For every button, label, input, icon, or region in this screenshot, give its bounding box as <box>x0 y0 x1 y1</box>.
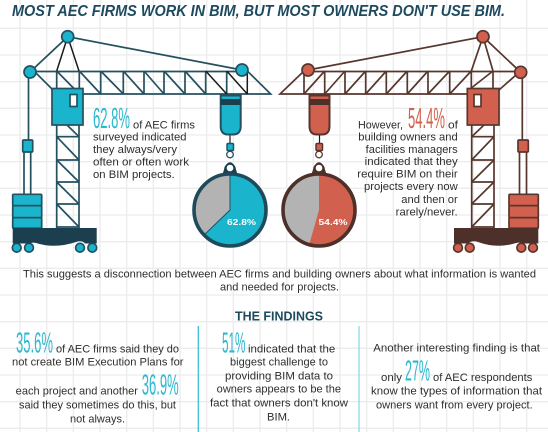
summary text: and needed for projects. <box>220 282 339 294</box>
finding 1: not create BIM Execution Plans for <box>12 356 184 368</box>
right crane statistic text: require BIM on their <box>357 169 458 181</box>
finding 1: 35.6% <box>16 327 53 359</box>
finding 3: owners want from every project. <box>376 399 533 411</box>
right crane statistic text: and then or <box>401 194 458 206</box>
left crane statistic text: they always/very <box>93 144 178 156</box>
right counterweight <box>509 140 538 228</box>
finding 3: Another interesting finding is that <box>373 342 540 354</box>
finding 1 <box>12 327 184 425</box>
left crane (AEC firms) <box>12 31 271 252</box>
finding 3: 27% <box>405 356 430 388</box>
left counterweight <box>13 140 42 228</box>
right hook <box>309 96 330 178</box>
right crane statistic text: building owners and <box>358 132 458 144</box>
finding 2: fact that owners don't know <box>210 398 348 410</box>
left crane statistic text: on BIM projects. <box>93 169 175 181</box>
right crane cab <box>467 88 499 125</box>
left crane statistic text: often or often work <box>93 157 190 169</box>
left crane wheels <box>12 243 97 252</box>
left crane nodes <box>24 31 248 78</box>
right crane statistic text: projects every now <box>364 181 458 193</box>
finding 2: owners appears to be the <box>217 384 341 396</box>
heading: the findings: THE FINDINGS <box>235 310 323 324</box>
left hook <box>220 96 241 178</box>
finding 2: indicated that the <box>248 344 335 356</box>
right crane statistic text: 54.4% <box>408 103 445 135</box>
title: MOST AEC FIRMS WORK IN BIM, BUT MOST OWNERS DON'T USE BIM. <box>12 3 505 20</box>
left crane statistic text: 62.8% <box>93 103 130 135</box>
finding 1: not always. <box>70 413 125 425</box>
finding 3 <box>371 342 542 411</box>
finding 2: biggest challenge to <box>230 356 328 368</box>
right crane statistic text <box>357 103 459 219</box>
left pie chart: 62.8% <box>194 174 266 246</box>
summary text <box>23 268 536 294</box>
finding 3: know the types of information that <box>371 386 542 398</box>
left crane cab <box>52 88 83 125</box>
right crane statistic text: However, <box>358 119 403 131</box>
summary text: This suggests a disconnection between AEC firms and building owners about what information is wanted <box>23 268 536 280</box>
finding 1: said they sometimes do this, but <box>19 399 176 411</box>
finding 2 <box>210 327 348 424</box>
finding 1: 36.9% <box>142 370 179 402</box>
right pie chart: 54.4%: 54.4% <box>318 217 348 227</box>
right crane statistic text: facilities managers <box>366 144 458 156</box>
left crane statistic text: surveyed indicated <box>93 132 186 144</box>
finding 3: of AEC respondents <box>433 372 533 384</box>
finding 1: each project and another <box>16 386 138 398</box>
left crane statistic text: of AEC firms <box>133 119 196 131</box>
right crane statistic text: rarely/never. <box>396 207 458 219</box>
right crane nodes <box>302 31 527 78</box>
finding 2: providing BIM data to <box>225 370 333 382</box>
right crane base <box>454 228 538 246</box>
left crane base <box>13 228 97 246</box>
right crane (owners) <box>280 31 538 252</box>
left crane statistic text <box>93 103 196 181</box>
finding 1: of AEC firms said they do <box>56 344 179 356</box>
column dividers <box>198 326 359 432</box>
right crane wheels <box>454 243 537 252</box>
right pie chart: 54.4% <box>282 174 356 246</box>
finding 2: BIM. <box>267 412 290 424</box>
right crane statistic text: indicated that they <box>365 156 458 168</box>
finding 2: 51% <box>222 327 246 359</box>
left pie chart: 62.8%: 62.8% <box>227 217 257 227</box>
right crane statistic text: of <box>448 119 459 131</box>
finding 3: only <box>381 372 403 384</box>
